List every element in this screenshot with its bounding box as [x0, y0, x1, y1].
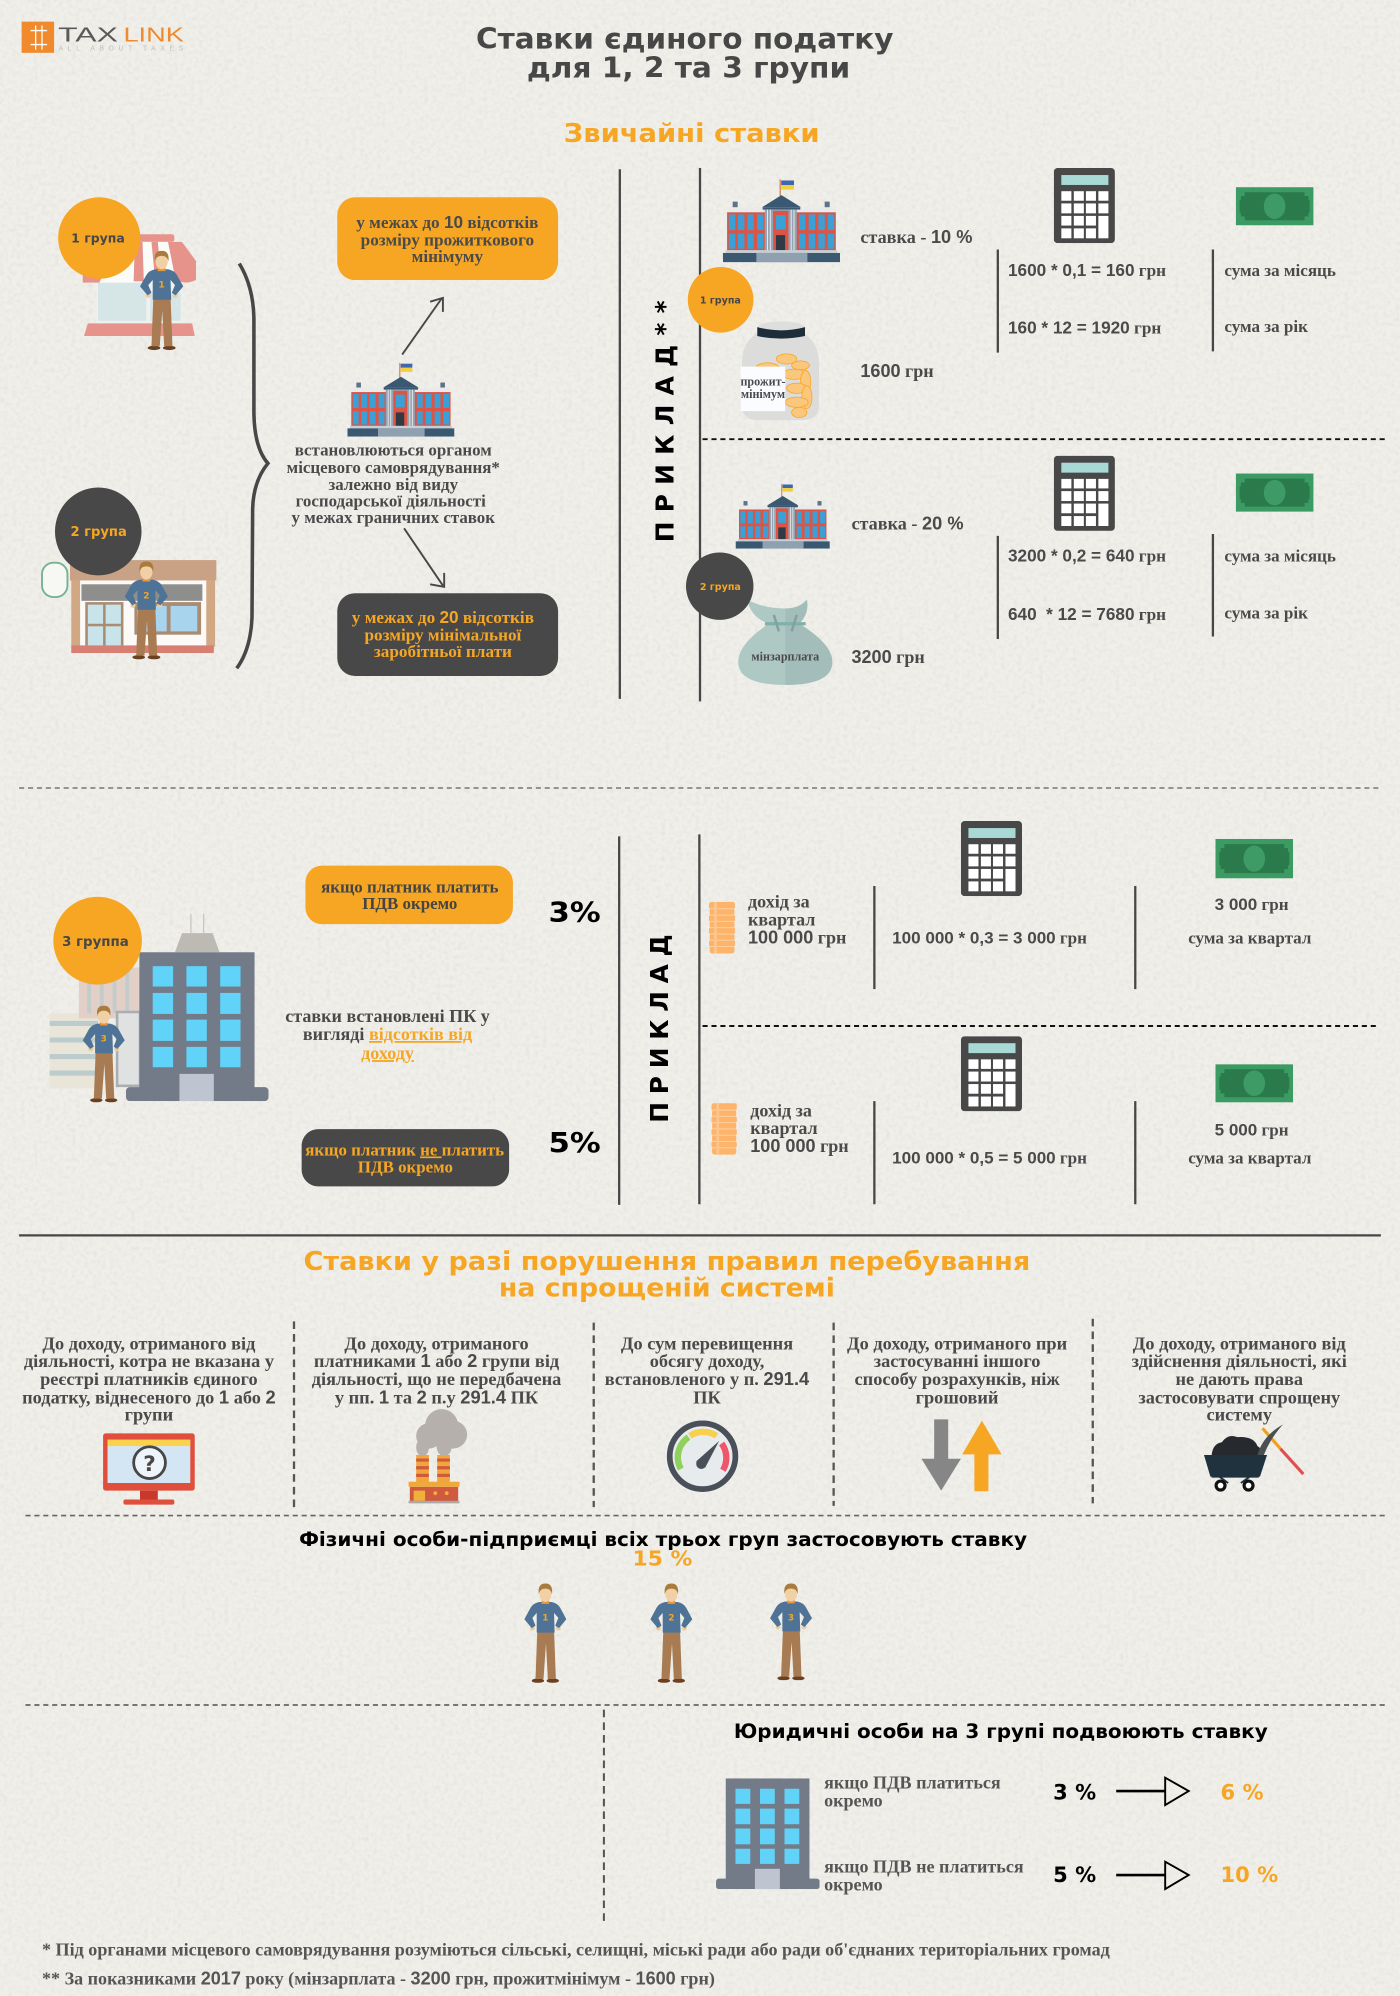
- column 1: unlisted activity: [22, 1333, 276, 1505]
- text: у пп. 1 та 2 п.у 291.4 ПК: [335, 1386, 539, 1407]
- value: 5 percent: 5%: [549, 1126, 601, 1159]
- circle: group 2: 2 група: [700, 582, 741, 593]
- text: [1132, 1333, 1347, 1425]
- income text: 100 000 грн: [750, 1136, 849, 1156]
- icon: down arrow: [921, 1419, 961, 1491]
- heading: legal entities: Юридичні особи на 3 групі подвоюють ставку: [734, 1720, 1268, 1743]
- legal entities: rate row VAT not paid: 5 %: [1053, 1863, 1096, 1887]
- label: example vertical: ПРИКЛАД**: [650, 300, 679, 542]
- example row: group 2: [686, 456, 1336, 685]
- income text: дохід за: [750, 1100, 812, 1120]
- dashed divider: [19, 787, 1381, 789]
- person: group 3: [83, 1006, 125, 1102]
- text: систему: [1206, 1405, 1272, 1425]
- callout: up to 10 percent: [337, 197, 558, 280]
- calculations: [998, 250, 1336, 353]
- legal entities: rate row VAT not paid: окремо: [824, 1874, 883, 1894]
- icon: government building: [736, 484, 830, 549]
- title: [476, 21, 894, 85]
- section rule: [19, 1234, 1381, 1236]
- calculation: 100 000 * 0,3 = 3 000 грн: [892, 928, 1087, 947]
- icon: monitor: [103, 1433, 195, 1505]
- icon: coin stack: [709, 902, 735, 953]
- circle: group 3: 3 группа: [62, 935, 129, 950]
- text: До доходу, отриманого при: [847, 1333, 1068, 1353]
- dashed divider: [25, 1515, 1389, 1517]
- calculations: 640 * 12 = 7680 грн: [1008, 604, 1166, 624]
- icon: office building: [716, 1778, 820, 1889]
- person: entrepreneur 1: [524, 1584, 566, 1683]
- legal entities: rate row VAT not paid: [824, 1857, 1278, 1894]
- calculation: [874, 886, 1312, 989]
- icon: gauge: [670, 1423, 735, 1489]
- arrow: up to callout: [402, 298, 443, 355]
- column 4: other payment method: [847, 1333, 1068, 1491]
- callout: up to 10 percent: мінімуму: [412, 247, 484, 266]
- icon: factory: [409, 1409, 467, 1503]
- icon: coin stack: [711, 1103, 737, 1155]
- calculations: сума за місяць: [1224, 261, 1336, 280]
- rate text: ставка - 10 %: [860, 227, 972, 247]
- income text: квартал: [748, 909, 815, 929]
- logo: LINK: [123, 24, 184, 46]
- icon: banknote: [1215, 839, 1293, 878]
- income text: дохід за: [748, 892, 810, 912]
- callout: VAT not paid: [302, 1129, 509, 1186]
- heading: regular rates: Звичайні ставки: [564, 119, 820, 149]
- callout: up to 20 percent: розміру мінімальної: [364, 625, 522, 644]
- circle: group 2: [55, 488, 142, 575]
- heading: individuals 15 percent: 15 %: [633, 1547, 692, 1571]
- circle: group 1: [58, 197, 140, 279]
- text: діяльності, що не передбачена: [312, 1369, 561, 1389]
- icon: money bag: [738, 600, 832, 685]
- text: застосуванні іншого: [874, 1351, 1040, 1371]
- circle: group 1: 1 група: [700, 296, 741, 307]
- text: rates set by tax code: вигляді відсотків від: [303, 1024, 472, 1044]
- text: здійснення діяльності, які: [1132, 1351, 1347, 1371]
- divider lines: example 1: [620, 168, 700, 701]
- legal entities: rate row VAT paid: окремо: [824, 1790, 883, 1810]
- icon: calculator: [1054, 456, 1115, 531]
- legal entities: rate row VAT paid: [824, 1773, 1264, 1810]
- person: group 1: [140, 251, 183, 350]
- column 2: activity not provided: [312, 1333, 561, 1503]
- dashed divider: [703, 1025, 1378, 1027]
- footnotes: ** За показниками 2017 року (мінзарплата - 3200 грн, прожитмінімум - 1600 грн): [42, 1969, 715, 1990]
- text: set by local government: господарської діяльності: [296, 492, 486, 511]
- calculation: сума за квартал: [1188, 928, 1312, 947]
- legal entities: rate row VAT not paid: якщо ПДВ не платиться: [824, 1857, 1024, 1877]
- icon: money bag: мінзарплата: [751, 650, 819, 664]
- circle: group 2: [686, 552, 753, 620]
- callout: up to 10 percent: у межах до 10 відсотків: [356, 212, 538, 232]
- text: ПК: [693, 1387, 721, 1407]
- title: Ставки єдиного податку: [476, 21, 894, 55]
- logo: ALL ABOUT TAXES: [59, 45, 184, 52]
- heading: violation rates: Ставки у разі порушення правил перебування: [304, 1247, 1030, 1277]
- example row: 3 percent: [709, 821, 1312, 989]
- text: грошовий: [916, 1387, 999, 1407]
- text: [22, 1333, 276, 1425]
- icon: calculator: [961, 821, 1022, 896]
- legal entities: rate row VAT paid: 3 %: [1053, 1780, 1096, 1804]
- footnotes: * Під органами місцевого самоврядування розуміються сільські, селищні, міські ради або ради об'єднаних територіальних громад: [42, 1939, 1110, 1959]
- legal entities: rate row VAT paid: 6 %: [1221, 1780, 1264, 1804]
- person: entrepreneur 3: 3: [788, 1613, 794, 1623]
- logo: [22, 22, 184, 53]
- legal entities: rate row VAT not paid: 10 %: [1221, 1863, 1278, 1887]
- person: entrepreneur 2: 2: [668, 1613, 674, 1623]
- income text: [748, 892, 846, 947]
- calculation: [874, 1101, 1312, 1204]
- text: set by local government: встановлюються органом: [295, 441, 492, 460]
- text: set by local government: у межах граничних ставок: [292, 508, 495, 527]
- callout: up to 20 percent: заробітньої плати: [374, 642, 512, 661]
- text: До доходу, отриманого від: [42, 1333, 256, 1353]
- person: entrepreneur 3: [770, 1584, 812, 1680]
- rate text: ставка - 20 %: [851, 514, 964, 534]
- person: group 1: 1: [159, 281, 165, 291]
- callout: up to 20 percent: [337, 593, 558, 676]
- column dividers: [294, 1319, 1093, 1507]
- calculations: 1600 * 0,1 = 160 грн: [1008, 260, 1166, 280]
- icon: banknote: [1236, 187, 1313, 225]
- text: set by local government: [287, 441, 500, 527]
- circle: group 1: 1 група: [71, 230, 125, 245]
- column 5: activity not allowed: [1132, 1333, 1347, 1490]
- text: До доходу, отриманого: [344, 1333, 529, 1353]
- calculations: 3200 * 0,2 = 640 грн: [1008, 545, 1166, 565]
- arrow: [1116, 1778, 1189, 1805]
- text: rates set by tax code: доходу: [361, 1043, 414, 1063]
- icon: calculator: [1054, 168, 1115, 243]
- column 3: exceeding income: [605, 1333, 810, 1489]
- person: group 2: 2: [143, 591, 149, 601]
- legal entities: rate row VAT paid: якщо ПДВ платиться: [824, 1773, 1001, 1793]
- circle: group 1: [688, 267, 753, 333]
- logo: TAX: [58, 24, 119, 46]
- callout: up to 10 percent: розміру прожиткового: [361, 231, 534, 250]
- calculation: 3 000 грн: [1215, 895, 1289, 914]
- text: set by local government: місцевого самоврядування*: [287, 458, 500, 477]
- circle: group 3: [53, 897, 142, 985]
- amount text: 1600 грн: [860, 361, 934, 381]
- icon: mine cart and pickaxe: [1204, 1424, 1303, 1490]
- icon: government building: [347, 363, 454, 437]
- text: застосовувати спрощену: [1138, 1387, 1340, 1407]
- example row: 5 percent: [711, 1036, 1312, 1204]
- text: платниками 1 або 2 групи від: [314, 1350, 560, 1371]
- text: [847, 1333, 1068, 1407]
- value: 3 percent: 3%: [549, 896, 601, 929]
- amount text: 3200 грн: [851, 647, 925, 667]
- text: податку, віднесеного до 1 або 2: [22, 1386, 276, 1407]
- label: example vertical: ПРИКЛАД: [645, 934, 674, 1123]
- icon: banknote: [1236, 474, 1313, 512]
- icon: banknote: [1215, 1064, 1293, 1102]
- text: [312, 1333, 561, 1407]
- text: rates set by tax code: [285, 1006, 490, 1063]
- person: entrepreneur 2: [650, 1584, 692, 1683]
- text: обсягу доходу,: [650, 1351, 764, 1371]
- text: set by local government: залежно від виду: [329, 475, 459, 494]
- income text: квартал: [750, 1118, 818, 1138]
- text: не дають права: [1175, 1369, 1303, 1389]
- heading: individuals 15 percent: [299, 1528, 1028, 1571]
- shop: group 2: [42, 560, 216, 653]
- example row: group 1: [688, 168, 1336, 420]
- footnotes: [42, 1939, 1110, 1990]
- text: групи: [125, 1405, 174, 1425]
- dashed dividers: [25, 1705, 1389, 1925]
- dashed divider: [703, 438, 1389, 440]
- text: способу розрахунків, ніж: [855, 1369, 1060, 1389]
- calculations: сума за місяць: [1224, 546, 1336, 565]
- building: group 3: [50, 914, 269, 1101]
- text: встановленого у п. 291.4: [605, 1368, 810, 1389]
- arrow: down to callout: [404, 528, 444, 587]
- text: реєстрі платників єдиного: [40, 1369, 258, 1389]
- calculations: [998, 534, 1336, 639]
- income text: 100 000 грн: [748, 927, 846, 947]
- icon: jar of coins: [740, 321, 819, 420]
- person: group 3: 3: [101, 1034, 107, 1044]
- text: діяльності, котра не вказана у: [24, 1351, 274, 1371]
- heading: violation rates: на спрощеній системі: [499, 1274, 835, 1304]
- calculation: 100 000 * 0,5 = 5 000 грн: [892, 1148, 1087, 1167]
- calculation: сума за квартал: [1188, 1148, 1312, 1167]
- circle: group 2: 2 група: [70, 525, 127, 540]
- callout: VAT paid: [305, 866, 513, 924]
- icon: monitor: ?: [143, 1452, 156, 1477]
- text: До сум перевищення: [621, 1333, 793, 1353]
- calculation: 5 000 грн: [1215, 1120, 1289, 1139]
- heading: individuals 15 percent: Фізичні особи-підприємці всіх трьох груп застосовують ставку: [299, 1528, 1028, 1551]
- icon: up arrow: [962, 1421, 1002, 1491]
- divider lines: example 2: [619, 834, 699, 1205]
- callout: up to 20 percent: у межах до 20 відсотків: [352, 607, 534, 627]
- person: group 2: [125, 561, 168, 659]
- icon: calculator: [961, 1036, 1022, 1111]
- callout: VAT paid: якщо платник платить: [321, 877, 499, 896]
- title: для 1, 2 та 3 групи: [527, 51, 850, 85]
- shop: group 1: [83, 234, 196, 336]
- income text: [750, 1100, 849, 1156]
- calculations: 160 * 12 = 1920 грн: [1008, 318, 1161, 338]
- callout: VAT not paid: ПДВ окремо: [358, 1157, 453, 1176]
- text: rates set by tax code: ставки встановлені ПК у: [285, 1006, 490, 1026]
- icon: jar of coins: прожит-: [740, 375, 786, 389]
- calculations: сума за рік: [1224, 604, 1308, 623]
- heading: violation rates: [304, 1247, 1030, 1304]
- text: [605, 1333, 810, 1407]
- arrow: [1116, 1862, 1189, 1889]
- curly brace: [237, 264, 268, 668]
- icon: jar of coins: мінімум: [741, 387, 785, 401]
- text: До доходу, отриманого від: [1133, 1333, 1346, 1353]
- calculations: сума за рік: [1224, 317, 1308, 336]
- callout: VAT not paid: якщо платник не платить: [305, 1140, 504, 1159]
- person: entrepreneur 1: 1: [542, 1613, 548, 1623]
- callout: VAT paid: ПДВ окремо: [362, 894, 457, 913]
- icon: government building: [723, 179, 840, 262]
